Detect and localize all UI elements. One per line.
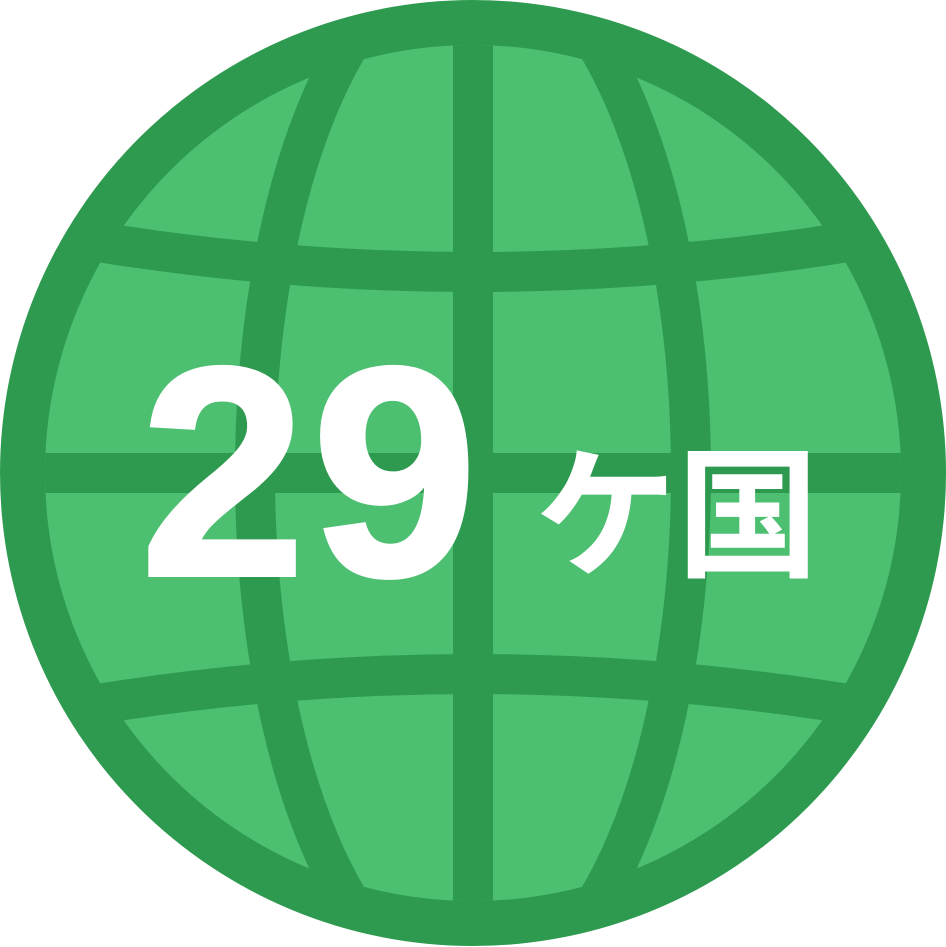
text: 29 countries: 29: [140, 306, 483, 639]
text: 29 countries: ケ国: [535, 438, 819, 597]
text: 29 countries: [140, 306, 819, 639]
